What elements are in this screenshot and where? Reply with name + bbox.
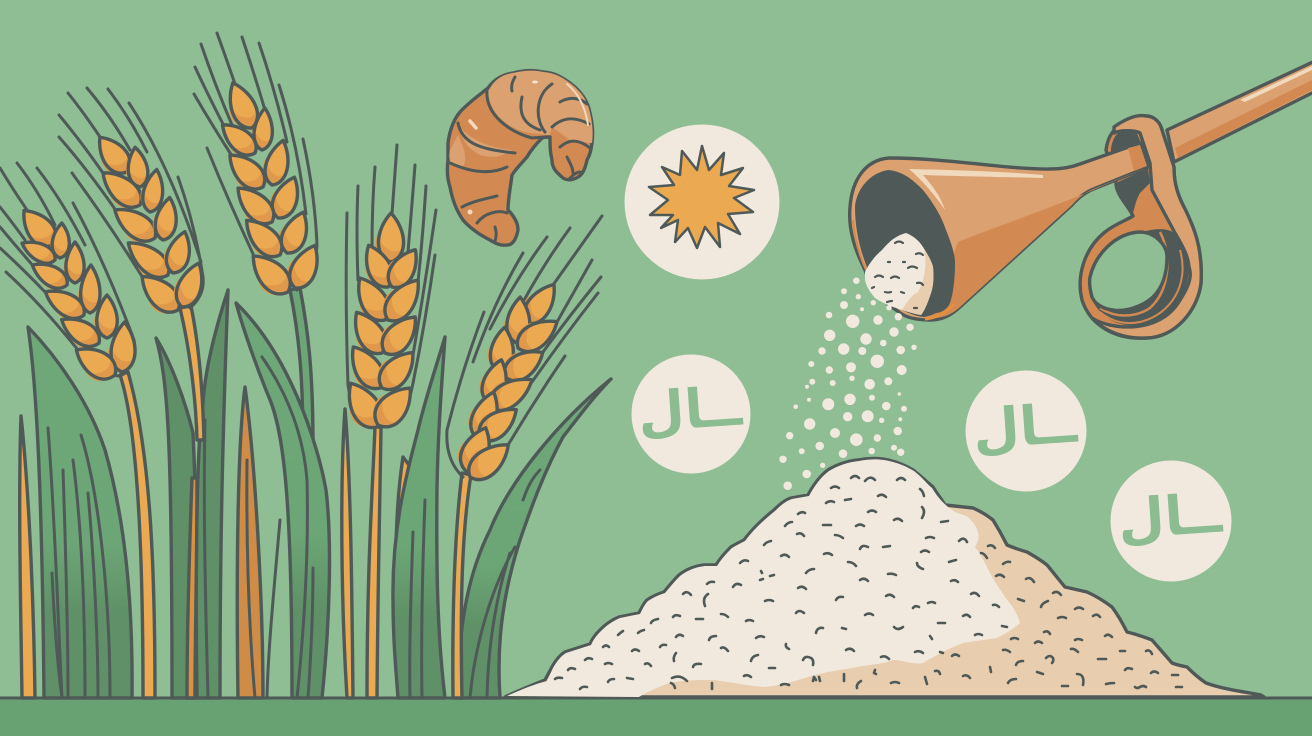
stems	[120, 372, 471, 698]
loop strap front	[1092, 116, 1201, 338]
dark centre leaf left	[156, 338, 197, 698]
green stem of third wheat	[290, 288, 313, 445]
grain specks	[555, 476, 1182, 689]
wheat ear 4	[336, 145, 436, 436]
ground strip	[0, 696, 1312, 736]
wheat ear 2	[59, 88, 210, 321]
scoop handle	[1167, 54, 1312, 162]
wheat ear 3	[194, 33, 327, 303]
scoop cone	[850, 143, 1148, 320]
right leaf	[393, 337, 445, 698]
flour scoop	[850, 54, 1312, 338]
grass and leaves	[20, 288, 611, 698]
narrow orange blade left	[20, 416, 35, 698]
far right leaf	[458, 379, 611, 698]
wheat ear 5	[447, 216, 602, 487]
cream flour area	[507, 459, 1020, 697]
stem of second wheat	[180, 306, 204, 698]
badge: halal centre: ــال	[971, 391, 1079, 462]
wheat ear 1	[0, 163, 138, 388]
stem of fourth wheat	[367, 427, 381, 698]
falling flour dots	[779, 277, 917, 490]
icon: starburst	[649, 146, 754, 248]
narrow orange blade centre right	[342, 409, 353, 698]
stem of first wheat	[120, 372, 155, 698]
big left leaf	[28, 327, 132, 698]
badge: halal centre	[966, 370, 1086, 492]
flour in scoop	[865, 233, 933, 315]
big centre leaf	[236, 303, 329, 698]
badge: halal right	[1110, 460, 1232, 582]
croissant	[447, 71, 593, 245]
badge: halal left	[632, 354, 750, 474]
badge: starburst	[624, 124, 780, 280]
flour mound	[505, 458, 1264, 697]
orange blade centre	[237, 387, 280, 698]
loop strap	[1080, 116, 1201, 338]
stem of fifth wheat	[453, 473, 471, 698]
small orange blade behind leaf	[396, 457, 410, 560]
scoop opening	[855, 170, 955, 317]
badge: halal right: ــال	[1116, 481, 1224, 552]
dark centre leaf right	[196, 290, 228, 698]
badge: halal left: ــال	[636, 374, 744, 445]
